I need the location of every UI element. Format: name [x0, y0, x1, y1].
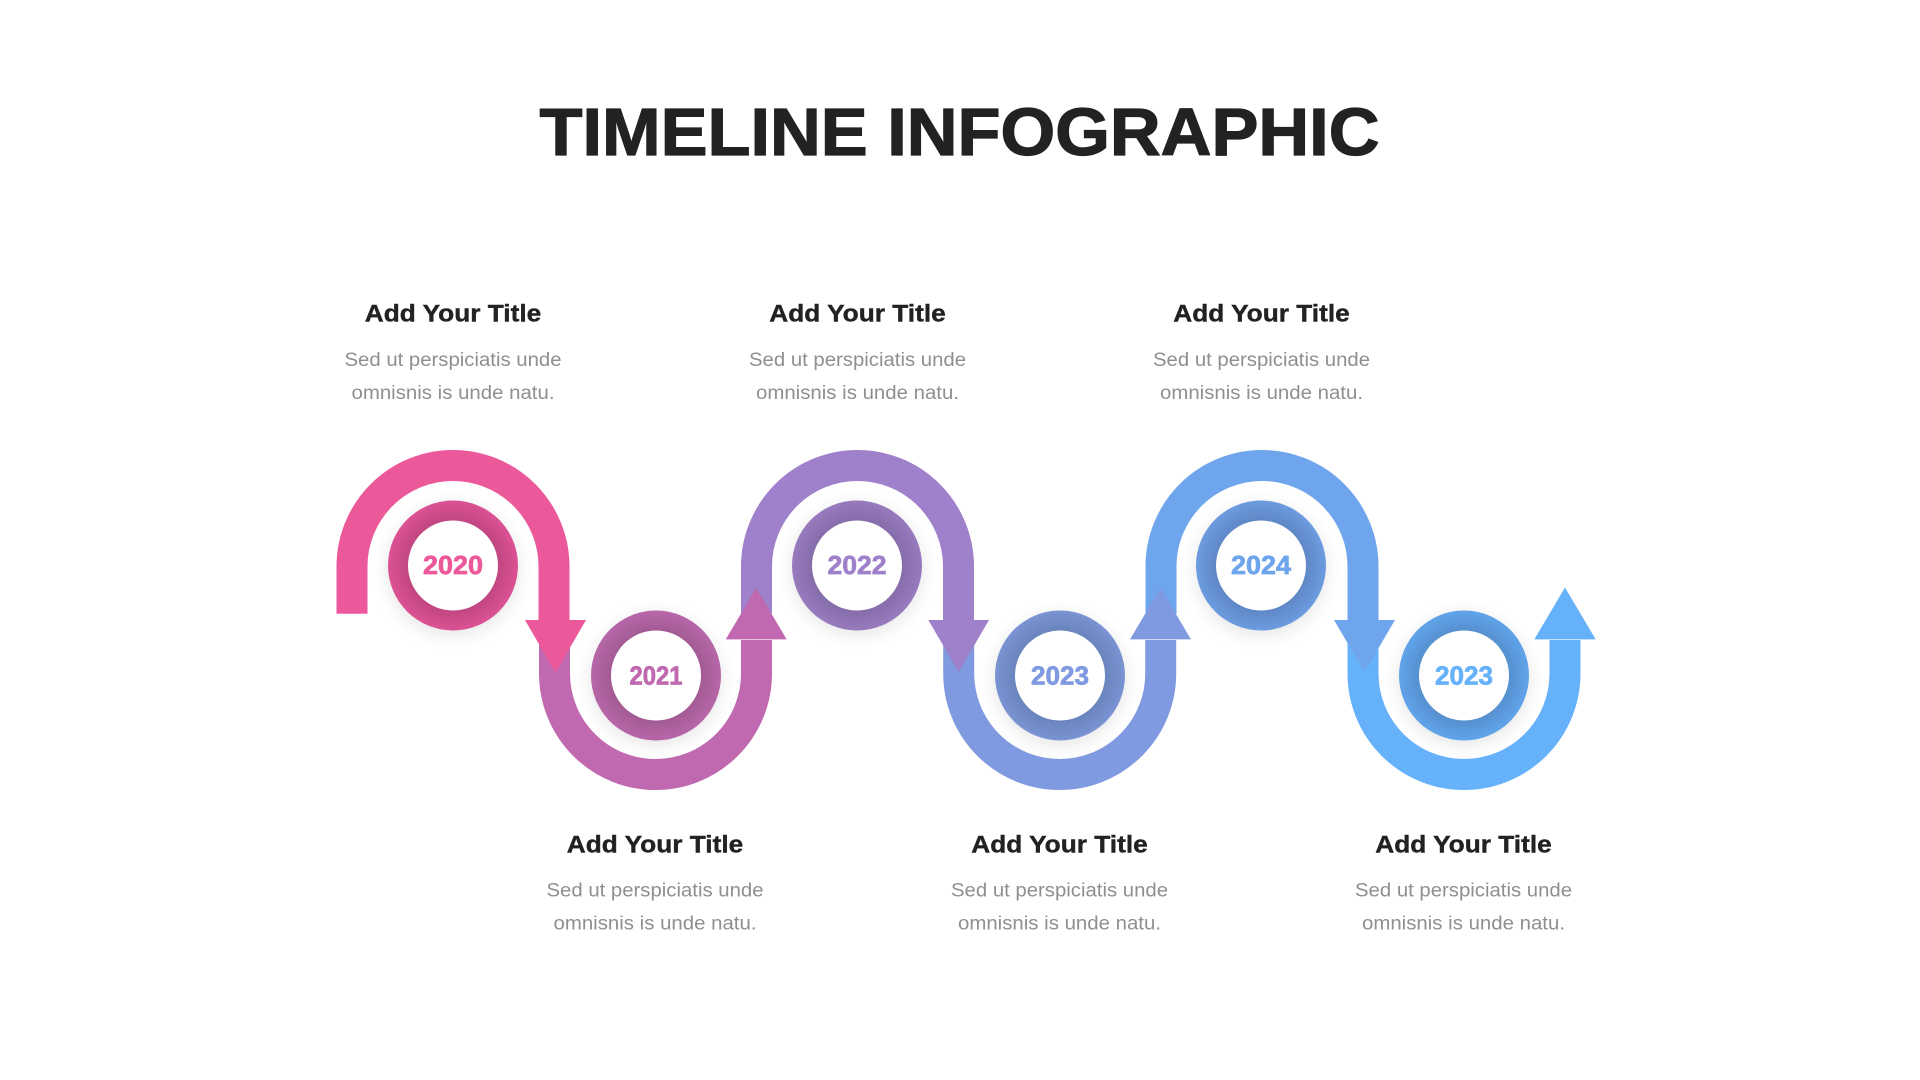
text block 1: Sed ut perspiciatis unde — [344, 350, 562, 371]
text block 4: omnisnis is unde natu. — [958, 914, 1161, 934]
year badge 2023: 2023 — [1031, 662, 1089, 690]
text block 6: Sed ut perspiciatis unde — [1355, 881, 1572, 902]
year badge 2023 last: 2023 — [1435, 662, 1493, 690]
year badge 2024 — [1196, 500, 1326, 635]
text block 6: omnisnis is unde natu. — [1362, 914, 1565, 934]
text block 3: omnisnis is unde natu. — [756, 383, 959, 404]
year badge 2021: 2021 — [630, 662, 682, 690]
arrow segment 6: light blue up arrow — [1363, 588, 1596, 774]
year badge 2022 — [792, 500, 922, 635]
text block 4 — [951, 831, 1168, 934]
arrow segment 3: purple arch with down arrow — [756, 466, 989, 672]
year badge 2022: 2022 — [828, 552, 886, 580]
text block 2 — [546, 831, 764, 934]
text block 2: Sed ut perspiciatis unde — [546, 881, 764, 902]
text block 4: Add Your Title — [971, 831, 1148, 858]
text block 1: omnisnis is unde natu. — [352, 383, 554, 404]
year badge 2020: 2020 — [423, 552, 483, 580]
arrow segment 2: magenta up arrow — [554, 588, 787, 774]
year badge 2021 — [591, 610, 721, 745]
text block 6 — [1355, 831, 1572, 934]
title: TIMELINE INFOGRAPHIC — [540, 96, 1380, 170]
text block 4: Sed ut perspiciatis unde — [951, 881, 1168, 902]
text block 5: Add Your Title — [1173, 300, 1350, 327]
text block 5: omnisnis is unde natu. — [1160, 383, 1363, 404]
text block 3: Sed ut perspiciatis unde — [749, 350, 966, 371]
text block 3 — [749, 300, 966, 404]
arrow segment 5: blue arch with down arrow — [1161, 466, 1395, 672]
arrow segment 4: periwinkle up arrow — [959, 588, 1191, 774]
arrow segment 1: pink arch with down arrow — [352, 466, 586, 673]
text block 1: Add Your Title — [365, 300, 541, 327]
text block 3: Add Your Title — [769, 300, 946, 327]
year badge 2023 last — [1399, 610, 1529, 745]
year badge 2023 — [995, 610, 1125, 745]
year badge 2024: 2024 — [1231, 552, 1292, 580]
text block 1 — [344, 300, 562, 404]
text block 5 — [1153, 300, 1370, 404]
text block 2: omnisnis is unde natu. — [554, 914, 756, 934]
year badge 2020 — [388, 500, 518, 635]
text block 6: Add Your Title — [1375, 831, 1552, 858]
text block 5: Sed ut perspiciatis unde — [1153, 350, 1370, 371]
text block 2: Add Your Title — [567, 831, 743, 858]
